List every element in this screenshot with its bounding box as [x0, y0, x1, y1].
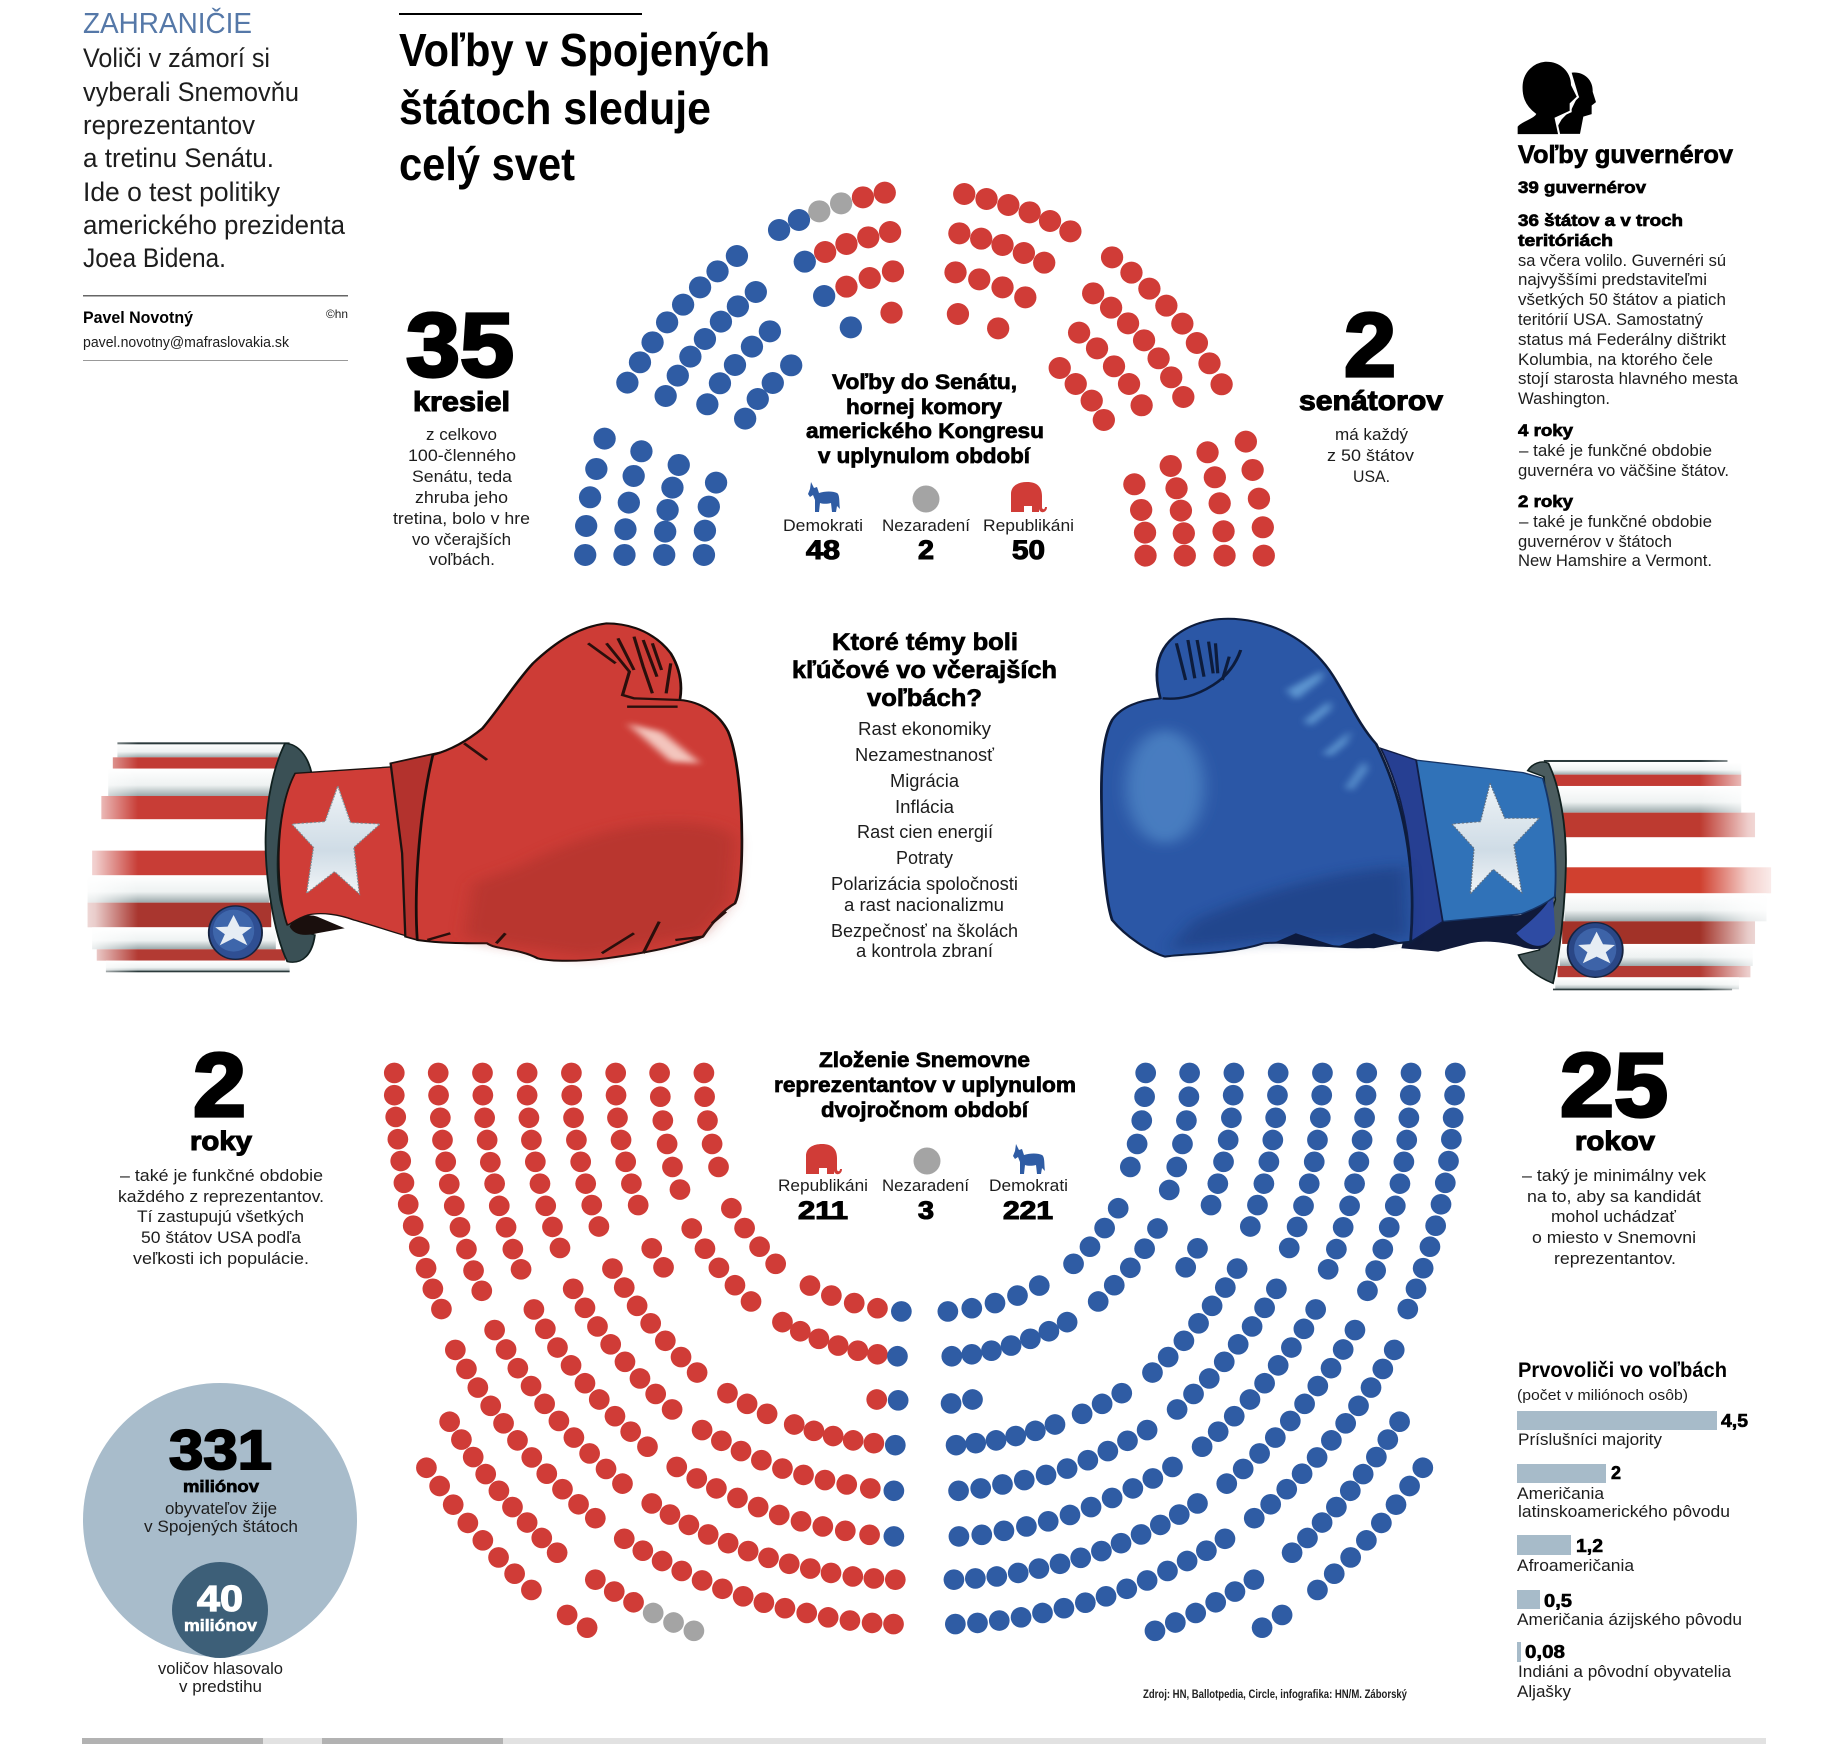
stat: 2 senators: z 50 štátov	[1327, 446, 1415, 465]
bar: african american	[1517, 1535, 1635, 1575]
intro paragraph: a tretinu Senátu.	[83, 143, 274, 173]
topics list	[831, 719, 1018, 961]
population circles: v predstihu	[179, 1677, 262, 1696]
bar: majority: Príslušníci majority	[1518, 1430, 1663, 1449]
house legend	[778, 1144, 1068, 1225]
stat: 2 senators: USA.	[1353, 467, 1390, 486]
governors panel	[1517, 61, 1739, 570]
republican house seats	[384, 1063, 906, 1638]
sleeve button	[1568, 923, 1623, 977]
intro paragraph: reprezentantov	[83, 110, 256, 140]
senate heading: Voľby do Senátu,	[832, 371, 1017, 394]
house heading: reprezentantov v uplynulom	[774, 1074, 1076, 1097]
sleeve stripes	[1544, 750, 1787, 997]
icon: donkey	[1013, 1144, 1045, 1174]
senate heading: amerického Kongresu	[806, 420, 1044, 443]
bar: latino: 2	[1611, 1463, 1621, 1483]
topics heading: Ktoré témy boli	[832, 629, 1018, 656]
stat: 2 years: veľkosti ich populácie.	[133, 1249, 309, 1268]
topics heading: voľbách?	[867, 685, 982, 712]
house heading	[774, 1049, 1076, 1122]
title	[399, 13, 770, 190]
governors panel: 36 štátov a v troch	[1518, 211, 1683, 230]
house legend: 211	[798, 1197, 848, 1225]
stat: 35 seats: zhruba jeho	[415, 488, 508, 507]
topics list: Potraty	[896, 848, 953, 868]
population circles: v Spojených štátoch	[144, 1517, 298, 1536]
topics heading: kľúčové vo včerajších	[792, 657, 1057, 684]
thumb creases	[1163, 640, 1241, 699]
bar: african american: Afroameričania	[1517, 1556, 1635, 1575]
intro paragraph: amerického prezidenta	[83, 210, 345, 240]
population circles: 40	[197, 1578, 243, 1619]
stat: 35 seats: vo včerajších	[412, 530, 511, 549]
governors panel: 39 guvernérov	[1518, 178, 1647, 197]
stat: 2 years	[118, 1036, 324, 1268]
bar chart: first-time voters: (počet v miliónoch osôb)	[1517, 1387, 1688, 1404]
governors panel: všetkých 50 štátov a piatich	[1518, 290, 1726, 309]
topics list: a rast nacionalizmu	[844, 895, 1004, 915]
bar: asian	[1517, 1590, 1742, 1629]
bar: majority	[1517, 1411, 1748, 1449]
author block: ©hn	[326, 307, 348, 321]
sleeve opening	[266, 743, 315, 962]
bar: native: Indiáni a pôvodní obyvatelia	[1518, 1662, 1732, 1681]
stat: 2 years: 50 štátov USA podľa	[141, 1228, 302, 1247]
author block: pavel.novotny@mafraslovakia.sk	[83, 334, 289, 351]
stat: 35 seats: z celkovo	[426, 425, 497, 444]
section label: Zahraničie: ZAHRANIČIE	[83, 6, 252, 40]
senate heading	[806, 371, 1044, 468]
independent senate seats	[808, 192, 852, 222]
stat: 2 years: roky	[190, 1126, 252, 1156]
bar: native: Aljašky	[1517, 1682, 1571, 1701]
stat: 2 years: Tí zastupujú všetkých	[137, 1207, 304, 1226]
author block: Pavel Novotný	[83, 309, 194, 327]
stat: 25 years: mohol uchádzať	[1551, 1207, 1677, 1226]
topics heading	[792, 629, 1057, 712]
governors panel: 4 roky	[1518, 421, 1574, 440]
population circles: miliónov	[183, 1477, 260, 1496]
governors panel: guvernérov v štátoch	[1518, 532, 1672, 551]
stat: 2 years: 2	[193, 1036, 246, 1136]
title: Voľby v Spojených	[399, 24, 770, 76]
stat: 35 seats: 35	[406, 296, 514, 396]
bar: native	[1517, 1642, 1732, 1701]
intro paragraph: Ide o test politiky	[83, 177, 281, 207]
stat: 35 seats: voľbách.	[429, 550, 495, 569]
icon: star on wrist	[292, 786, 380, 894]
senate legend: Demokrati	[783, 516, 863, 535]
house legend: Demokrati	[989, 1176, 1068, 1195]
topics list: Migrácia	[890, 771, 960, 791]
icon: independent circle	[912, 486, 940, 512]
glove body	[416, 623, 742, 961]
house seats: right half	[937, 1063, 1466, 1641]
stat: 2 years: každého z reprezentantov.	[118, 1187, 324, 1206]
section label and intro	[83, 6, 345, 273]
governors panel: najvyššími predstaviteľmi	[1518, 270, 1707, 289]
wrist band	[1381, 748, 1443, 943]
illustration: red boxing glove	[60, 623, 742, 980]
governors panel: 2 roky	[1518, 492, 1574, 511]
topics list: Bezpečnosť na školách	[831, 921, 1018, 941]
stat: 25 years	[1522, 1036, 1707, 1268]
stat: 25 years: rokov	[1575, 1126, 1655, 1156]
population circles: miliónov	[184, 1616, 258, 1635]
governors panel: – také je funkčné obdobie	[1519, 512, 1712, 531]
topics list: Rast ekonomiky	[858, 719, 991, 739]
senate heading: hornej komory	[846, 396, 1002, 419]
governors panel: Kolumbia, na ktorého čele	[1518, 350, 1713, 369]
icon: elephant	[806, 1144, 842, 1174]
house heading: dvojročnom období	[821, 1099, 1029, 1122]
stat: 35 seats	[393, 296, 530, 569]
glove shading	[464, 823, 735, 957]
governors panel: New Hamshire a Vermont.	[1518, 551, 1712, 570]
source note: Zdroj: HN, Ballotpedia, Circle, infografika: HN/M. Záborský	[1143, 1689, 1407, 1701]
governors panel: teritóriách	[1518, 231, 1613, 250]
topics list: Inflácia	[895, 797, 955, 817]
author block	[83, 295, 348, 361]
topics list: a kontrola zbraní	[856, 941, 993, 961]
house heading: Zloženie Snemovne	[819, 1049, 1030, 1072]
stat: 25 years: o miesto v Snemovni	[1532, 1228, 1696, 1247]
population circles	[83, 1383, 357, 1696]
house seats: left half	[384, 1063, 912, 1641]
bar: asian: Američania ázijského pôvodu	[1517, 1610, 1742, 1629]
topics list: Polarizácia spoločnosti	[831, 874, 1018, 894]
icon: elephant	[1011, 482, 1047, 512]
bar chart: first-time voters: Prvovoliči vo voľbách	[1518, 1359, 1727, 1382]
senate legend	[783, 482, 1074, 565]
governors panel: status má Federálny dištrikt	[1518, 330, 1726, 349]
stat: 2 senators	[1299, 296, 1443, 486]
stat: 2 senators: senátorov	[1299, 385, 1443, 416]
bar: latino: Američania	[1517, 1484, 1605, 1503]
bar: latino	[1517, 1463, 1730, 1521]
icon: independent circle	[914, 1148, 940, 1174]
thumb creases	[427, 637, 726, 953]
footer bar	[82, 1738, 1766, 1744]
governors panel: guvernéra vo väčšine štátov.	[1518, 461, 1729, 480]
democrat seats on left side	[884, 1301, 912, 1547]
icon: two head silhouettes	[1517, 61, 1596, 135]
intro paragraph	[83, 43, 345, 273]
topics list: Nezamestnanosť	[855, 745, 994, 765]
bar chart: first-time voters	[1517, 1359, 1748, 1701]
house legend: 3	[918, 1197, 934, 1225]
glove dark shading	[1167, 867, 1408, 950]
independent house seats	[643, 1603, 704, 1641]
democrat senate seats	[574, 209, 862, 566]
intro paragraph: Joea Bidena.	[83, 243, 226, 273]
bar: african american: 1,2	[1576, 1536, 1603, 1556]
stat: 25 years: – taký je minimálny vek	[1522, 1166, 1707, 1185]
title: štátoch sleduje	[399, 82, 711, 134]
stat: 35 seats: Senátu, teda	[412, 467, 513, 486]
house legend: 221	[1003, 1197, 1053, 1225]
stat: 2 senators: 2	[1344, 296, 1396, 396]
wrist panel	[279, 766, 409, 937]
lower wrist shadow	[1401, 893, 1554, 952]
sleeve opening	[1519, 762, 1566, 983]
wrist panel	[1415, 760, 1556, 922]
icon: donkey	[808, 482, 840, 512]
stat: 25 years: na to, aby sa kandidát	[1527, 1187, 1701, 1206]
governors panel: teritórií USA. Samostatný	[1518, 310, 1703, 329]
icon: star on wrist	[1452, 783, 1539, 894]
senate heading: v uplynulom období	[818, 445, 1031, 468]
cuff shadow	[290, 915, 345, 935]
population circles: 331	[169, 1418, 272, 1481]
governors panel: sa včera volilo. Guvernéri sú	[1518, 251, 1726, 270]
governors panel: stojí starosta hlavného mesta	[1518, 369, 1739, 388]
sleeve button	[209, 906, 262, 959]
glove highlight	[627, 723, 701, 763]
title: celý svet	[399, 138, 575, 190]
stat: 25 years: 25	[1560, 1036, 1668, 1136]
wrist band	[391, 753, 439, 940]
sleeve stripes	[60, 733, 290, 980]
population circles: obyvateľov žije	[165, 1499, 277, 1518]
stat: 2 senators: má každý	[1335, 425, 1408, 444]
bar: native: 0,08	[1525, 1642, 1565, 1662]
house legend: Nezaradení	[882, 1176, 969, 1195]
key topics	[792, 629, 1057, 961]
bar: latino: latinskoamerického pôvodu	[1518, 1502, 1730, 1521]
topics list: Rast cien energií	[857, 822, 993, 842]
stat: 35 seats: 100-členného	[408, 446, 516, 465]
population circle	[83, 1383, 357, 1657]
stat: 25 years: reprezentantov.	[1554, 1249, 1676, 1268]
governors panel: Voľby guvernérov	[1518, 141, 1733, 169]
senate legend: 48	[806, 535, 840, 565]
stat: 35 seats: tretina, bolo v hre	[393, 509, 530, 528]
stat: 2 years: – také je funkčné obdobie	[120, 1166, 323, 1185]
senate legend: 2	[918, 535, 934, 565]
senate seat chart	[574, 182, 1275, 567]
republican senate seats	[814, 182, 1275, 567]
glove body	[1101, 619, 1412, 957]
early voters circle	[172, 1562, 268, 1658]
stat: 35 seats: kresiel	[413, 386, 510, 417]
population circles: voličov hlasovalo	[158, 1659, 283, 1678]
senate legend: 50	[1012, 535, 1045, 565]
glove highlights	[1126, 730, 1204, 843]
intro paragraph: Voliči v zámorí si	[83, 43, 270, 73]
governors panel: – také je funkčné obdobie	[1519, 441, 1712, 460]
governors panel: Washington.	[1518, 389, 1610, 408]
intro paragraph: vyberali Snemovňu	[83, 77, 299, 107]
bar: asian: 0,5	[1544, 1591, 1572, 1611]
senate legend: Nezaradení	[882, 516, 970, 535]
house legend: Republikáni	[778, 1176, 868, 1195]
bar: majority: 4,5	[1721, 1411, 1748, 1431]
illustration: blue boxing glove	[1101, 619, 1787, 997]
senate legend: Republikáni	[983, 516, 1074, 535]
